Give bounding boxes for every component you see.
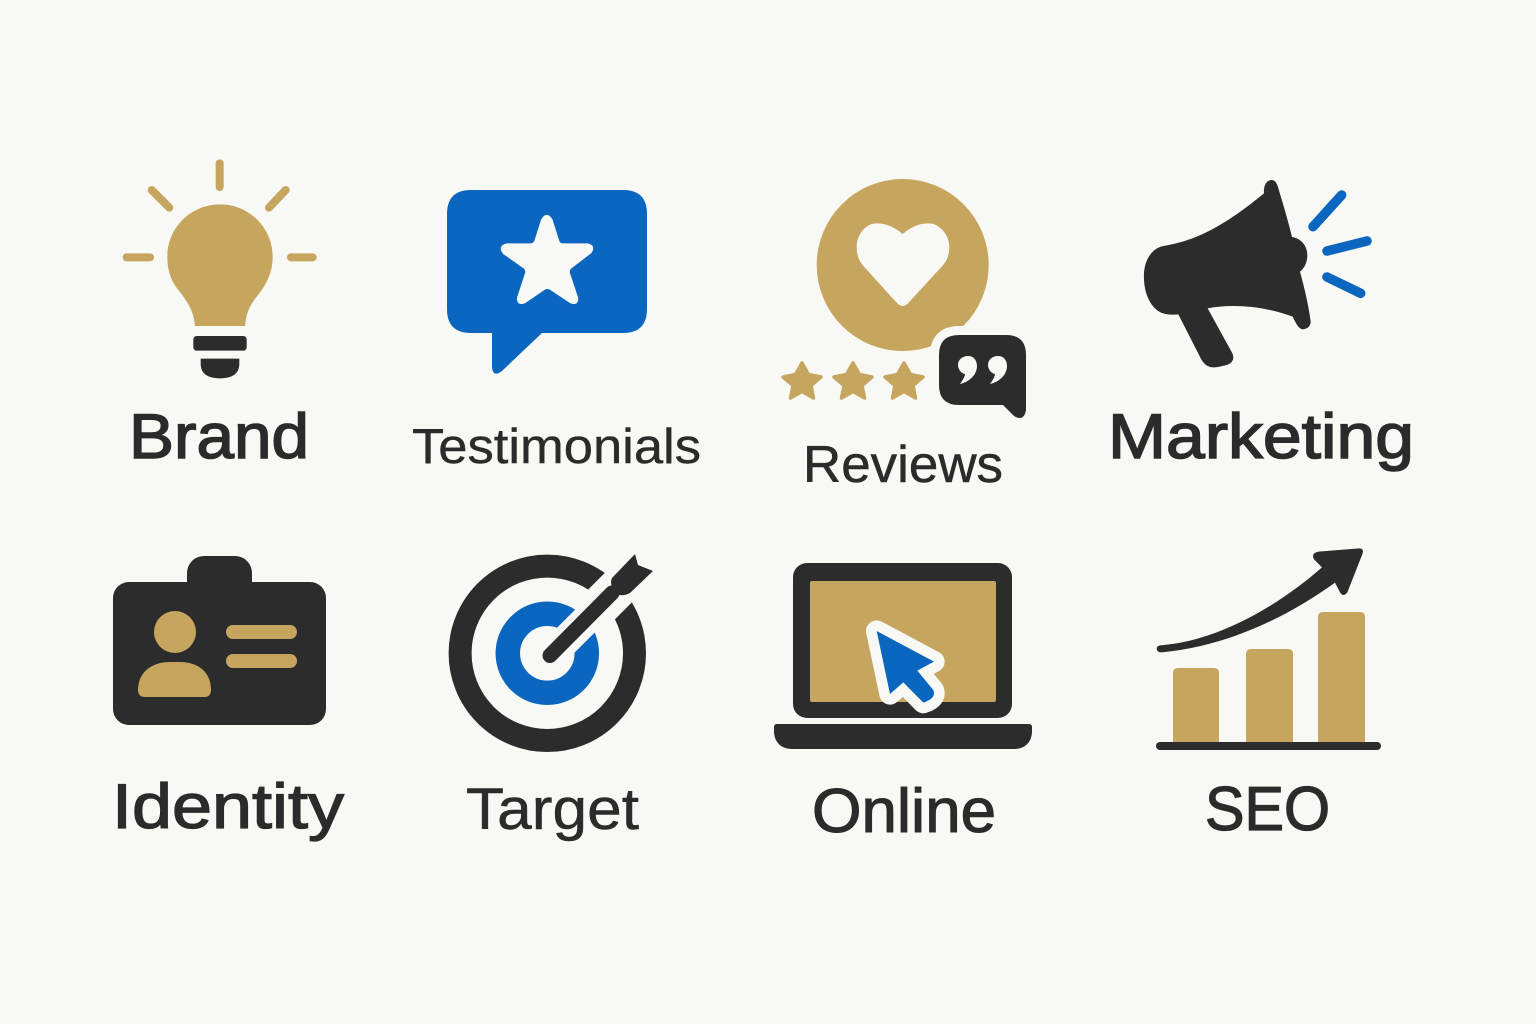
label: Marketing: Marketing: [1108, 402, 1414, 472]
icon: light bulb: [127, 163, 313, 378]
icon: megaphone: [1144, 180, 1367, 367]
label: Online: Online: [812, 777, 996, 846]
label: Testimonials: Testimonials: [412, 419, 701, 474]
icon: speech bubble with star: [447, 190, 647, 374]
label: SEO: SEO: [1205, 775, 1330, 844]
label: Identity: Identity: [112, 772, 345, 842]
icon: target with arrow: [460, 554, 653, 740]
icon: identity badge: [113, 556, 326, 725]
label: Brand: Brand: [129, 402, 309, 472]
label: Target: Target: [466, 777, 639, 842]
icon: laptop with cursor: [774, 563, 1032, 749]
label: Reviews: Reviews: [803, 436, 1003, 494]
quote bubble: [939, 335, 1026, 418]
icon: reviews: [783, 179, 1026, 418]
cursor: [877, 631, 934, 703]
review stars: [783, 363, 923, 398]
icon: SEO growth chart: [1156, 548, 1381, 750]
